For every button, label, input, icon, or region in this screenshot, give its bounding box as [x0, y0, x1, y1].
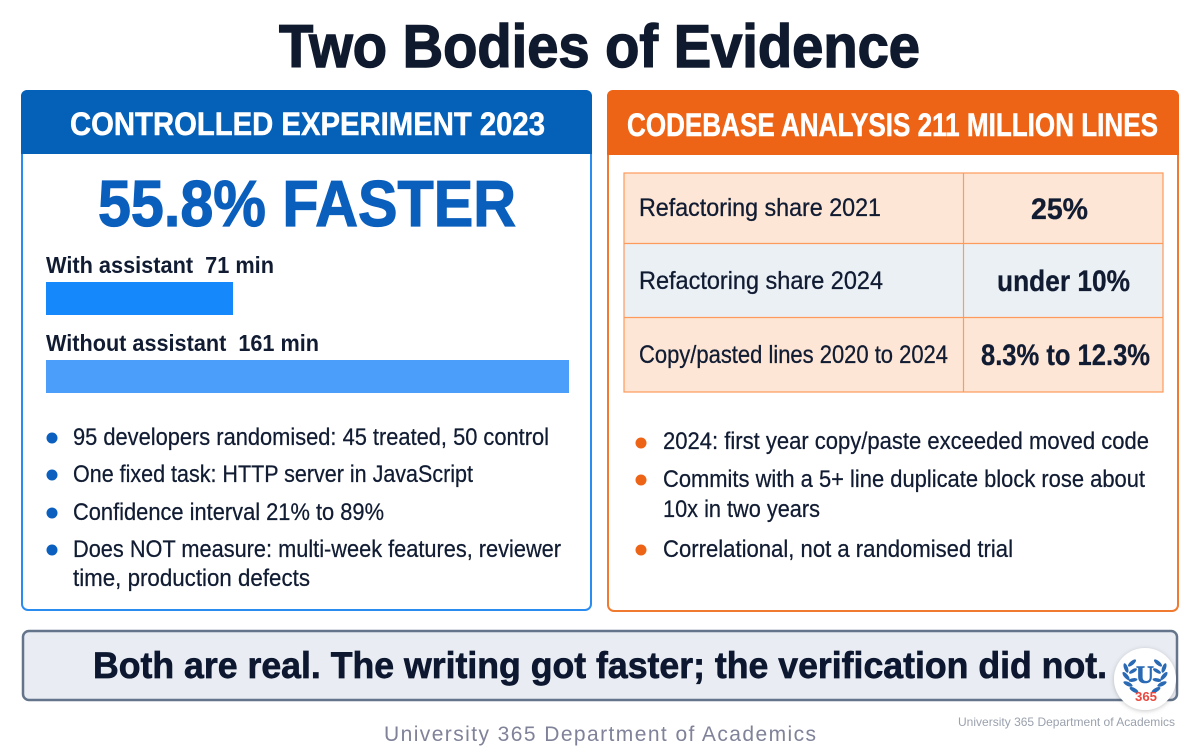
comparison table: Refactoring share 2024	[639, 267, 883, 295]
comparison table: 8.3% to 12.3%	[981, 339, 1150, 372]
bar chart: task time	[46, 252, 569, 393]
headline stat: 55.8% FASTER	[98, 167, 516, 240]
small footer credit: University 365 Department of Academics	[958, 715, 1175, 729]
centre footer credit: University 365 Department of Academics	[384, 723, 816, 746]
bullet list: codebase findings: 10x in two years	[663, 496, 820, 523]
bullet list: experiment facts: Does NOT measure: multi-week features, reviewer	[73, 536, 561, 563]
panel: controlled experiment	[21, 90, 592, 610]
logo: University 365	[1114, 648, 1176, 710]
bullet list: experiment facts: Confidence interval 21% to 89%	[73, 499, 384, 526]
bullet list: codebase findings	[636, 428, 1149, 563]
bullet list: codebase findings: Commits with a 5+ line duplicate block rose about	[663, 466, 1145, 493]
bullet list: experiment facts: 95 developers randomised: 45 treated, 50 control	[73, 424, 549, 451]
bullet list: codebase findings: 2024: first year copy/paste exceeded moved code	[663, 428, 1149, 455]
bullet list: experiment facts: One fixed task: HTTP server in JavaScript	[73, 461, 473, 488]
bullet list: codebase findings: Correlational, not a randomised trial	[663, 536, 1013, 563]
comparison table: Copy/pasted lines 2020 to 2024	[639, 341, 948, 369]
bullet list: experiment facts: time, production defects	[73, 565, 310, 592]
takeaway banner	[23, 631, 1177, 700]
comparison table: Refactoring share 2021	[639, 194, 881, 222]
comparison table: 25%	[1031, 193, 1088, 226]
bullet list: experiment facts	[46, 424, 561, 592]
bar chart: task time: With assistant 71 min	[46, 252, 274, 278]
bar chart: task time: Without assistant 161 min	[46, 330, 319, 356]
panel header: controlled experiment	[21, 90, 592, 154]
logo: University 365: 365	[1135, 689, 1157, 704]
logo: University 365: U	[1136, 662, 1154, 689]
comparison table: under 10%	[997, 265, 1130, 298]
takeaway banner: Both are real. The writing got faster; the verification did not.	[93, 645, 1107, 686]
title: Two Bodies of Evidence	[279, 13, 920, 80]
panel header: codebase analysis	[607, 90, 1179, 155]
panel header: controlled experiment: CONTROLLED EXPERIMENT 2023	[70, 106, 545, 142]
panel: codebase analysis	[607, 90, 1179, 611]
comparison table	[624, 173, 1163, 392]
